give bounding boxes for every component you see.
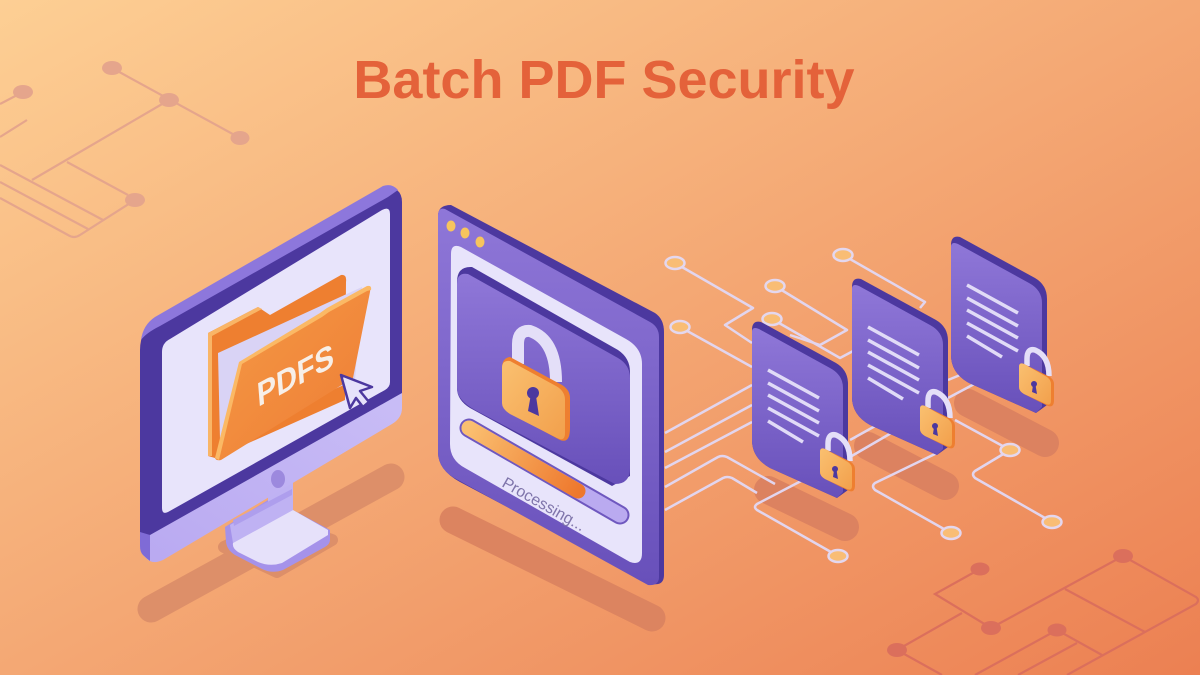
circuit traces <box>665 255 1052 556</box>
monitor frame <box>140 188 402 535</box>
monitor <box>140 185 402 572</box>
folder <box>208 275 372 460</box>
chin side <box>140 530 150 561</box>
decorative circuit: top left <box>0 61 250 237</box>
window face <box>438 209 659 585</box>
padlock 2 <box>920 392 955 448</box>
monitor chin <box>140 392 402 562</box>
window panel <box>450 246 642 563</box>
shadow: monitor <box>151 477 391 609</box>
window dots <box>446 220 484 248</box>
window body <box>438 205 664 584</box>
large padlock <box>502 331 570 441</box>
circuit nodes <box>666 249 1062 562</box>
folder back <box>208 275 346 458</box>
progress label: Processing... <box>499 475 588 535</box>
monitor logo <box>271 470 285 488</box>
padlock 1 <box>820 435 855 491</box>
document 3 <box>951 237 1054 413</box>
monitor top edge <box>141 185 398 340</box>
monitor screen <box>162 209 390 513</box>
folder label: PDFS <box>256 336 335 414</box>
monitor stand <box>225 480 330 572</box>
shadow: document stack <box>768 403 1045 527</box>
title: Batch PDF Security <box>353 50 855 110</box>
document 2 <box>852 279 955 455</box>
padlock 3 <box>1019 350 1054 406</box>
processing window <box>438 205 664 585</box>
cursor <box>341 375 372 408</box>
document 1 <box>752 322 855 498</box>
shadow: window <box>453 520 652 618</box>
decorative circuit: bottom right <box>887 549 1198 675</box>
folder front <box>215 288 370 460</box>
paper <box>218 287 362 440</box>
lock panel <box>457 267 630 486</box>
progress bar <box>469 428 620 515</box>
